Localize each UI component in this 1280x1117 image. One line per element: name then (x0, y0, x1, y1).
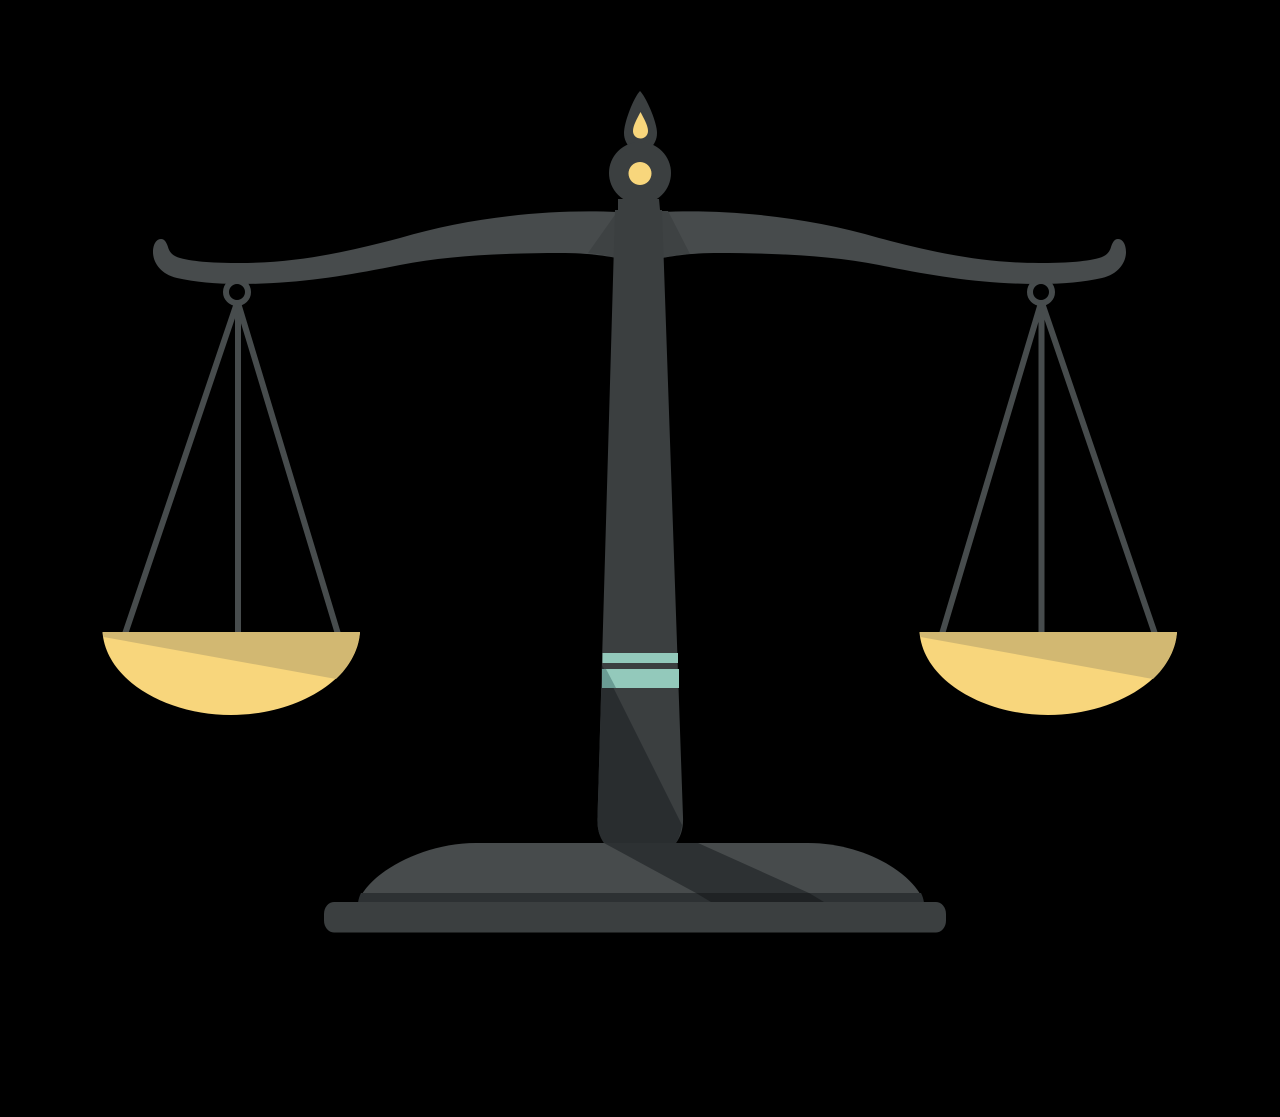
right scale pan assembly (920, 281, 1177, 715)
dome lower stripe (358, 893, 924, 903)
finial knob (609, 142, 671, 204)
finial (609, 91, 671, 204)
yellow dot (628, 162, 652, 185)
teal band lower (602, 669, 679, 688)
left scale pan assembly (102, 281, 360, 715)
dome diagonal shadow (604, 843, 809, 893)
finial drop (624, 91, 657, 148)
right beam arm (662, 211, 1126, 284)
left beam arm (153, 211, 617, 284)
beam (153, 211, 1126, 284)
teal band upper (602, 653, 678, 663)
stripe diagonal shadow (696, 893, 824, 902)
right hanging strings (942, 303, 1155, 634)
right pan (920, 632, 1177, 715)
base (324, 843, 946, 932)
column (597, 199, 683, 843)
left ring (226, 281, 248, 303)
left hanging strings (125, 303, 338, 634)
beam shading near column (588, 211, 690, 258)
teal band shadow (602, 669, 616, 688)
column body (597, 199, 683, 843)
column shadow (597, 665, 682, 843)
base plate (324, 902, 946, 932)
left pan (102, 632, 360, 715)
right ring (1030, 281, 1052, 303)
base dome (358, 843, 924, 903)
yellow flame (633, 112, 648, 138)
